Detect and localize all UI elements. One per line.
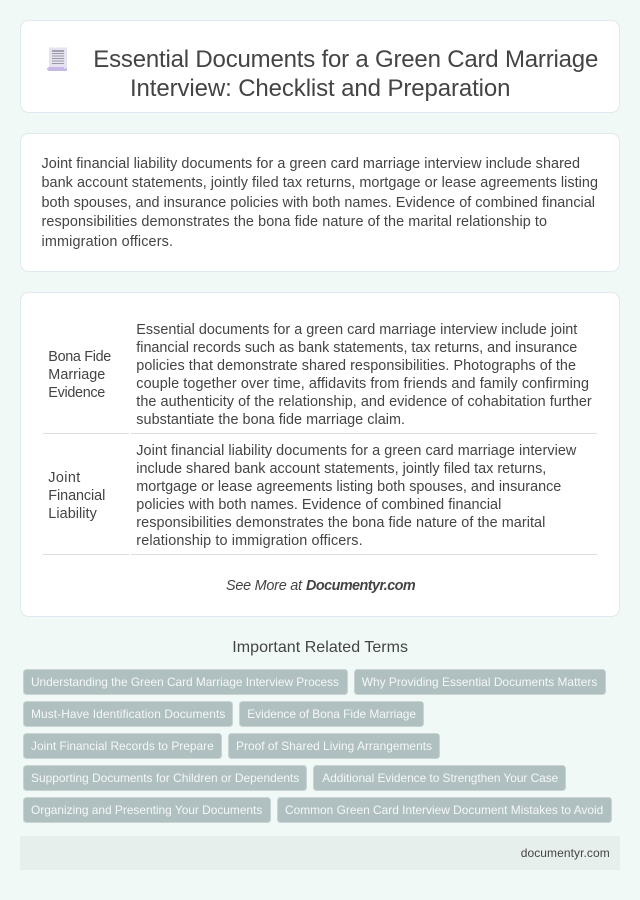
text block: summary paragraph: bank account statements, jointly filed tax returns, mortgage or lease agreements listing — [42, 175, 598, 191]
text block: summary paragraph — [42, 156, 598, 250]
row label: Liability — [48, 506, 98, 522]
tag — [24, 798, 270, 822]
text block: summary paragraph: both spouses, and insurance policies with both names. Evidence of combined financial — [42, 195, 595, 211]
tag — [24, 734, 222, 758]
panel: details table — [20, 292, 620, 616]
tag: Why Providing Essential Documents Matters — [362, 675, 597, 689]
tag: Must-Have Identification Documents — [31, 707, 225, 721]
row description — [136, 443, 577, 549]
text block: summary paragraph: immigration officers. — [42, 234, 173, 250]
row description: couple together over time, affidavits from friends and family confirming — [136, 376, 589, 392]
title — [93, 46, 598, 102]
row description: policies with both names. Evidence of combined financial — [136, 497, 501, 513]
icon: document — [47, 47, 67, 71]
tag: Supporting Documents for Children or Dependents — [31, 771, 299, 785]
tag — [24, 670, 348, 694]
link: see more: See More at — [226, 578, 303, 594]
row description: include shared bank account statements, jointly filed tax returns, — [136, 461, 546, 477]
panel: summary — [20, 134, 620, 272]
row description — [136, 322, 592, 428]
tag: Understanding the Green Card Marriage Interview Process — [31, 675, 339, 689]
text block: summary paragraph: responsibilities demonstrates the bona fide nature of the marital relationship to — [42, 214, 547, 230]
row description: policies that demonstrate shared responsibilities. Photographs of the — [136, 358, 576, 374]
table row: Bona Fide Marriage Evidence — [48, 322, 592, 428]
link: see more: Documentyr.com — [306, 578, 416, 594]
tag: Joint Financial Records to Prepare — [31, 739, 214, 753]
row label: Joint — [48, 470, 80, 486]
tag — [24, 702, 232, 726]
text block: summary paragraph: Joint financial liability documents for a green card marriage interview include shared — [42, 156, 580, 172]
tag: Additional Evidence to Strengthen Your Case — [322, 771, 559, 785]
tag — [354, 670, 606, 694]
row description: substantiate the bona fide marriage claim. — [136, 412, 405, 428]
footer — [20, 836, 620, 870]
row label — [48, 349, 111, 401]
row description: mortgage or lease agreements listing both spouses, and insurance — [136, 479, 561, 495]
tag: Common Green Card Interview Document Mistakes to Avoid — [285, 803, 603, 817]
table row: Joint Financial Liability — [48, 443, 577, 549]
tag — [278, 798, 612, 822]
tag: Proof of Shared Living Arrangements — [236, 739, 432, 753]
row description: relationship to immigration officers. — [136, 533, 363, 549]
panel: title header — [20, 20, 620, 112]
row label: Evidence — [48, 385, 105, 401]
title: Interview: Checklist and Preparation — [130, 75, 510, 102]
related terms tags — [24, 670, 612, 822]
row description: financial records such as bank statements, tax returns, and insurance — [136, 340, 577, 356]
link: see more — [226, 578, 416, 594]
tag: Evidence of Bona Fide Marriage — [247, 707, 416, 721]
tag — [314, 766, 566, 790]
row description: responsibilities demonstrates the bona fide nature of the marital — [136, 515, 545, 531]
row description: Essential documents for a green card marriage interview include joint — [136, 322, 577, 338]
title: Essential Documents for a Green Card Marriage — [93, 46, 598, 73]
row label: Marriage — [48, 367, 105, 383]
heading: related terms: Important Related Terms — [232, 639, 408, 656]
row description: Joint financial liability documents for a green card marriage interview — [136, 443, 577, 459]
tag — [24, 766, 306, 790]
tag — [240, 702, 424, 726]
row label — [48, 470, 105, 522]
footer text: documentyr.com — [521, 846, 610, 860]
tag: Organizing and Presenting Your Documents — [31, 803, 262, 817]
row description: the authenticity of the relationship, and evidence of cohabitation further — [136, 394, 592, 410]
tag — [228, 734, 440, 758]
row label: Financial — [48, 488, 105, 504]
row label: Bona Fide — [48, 349, 111, 365]
